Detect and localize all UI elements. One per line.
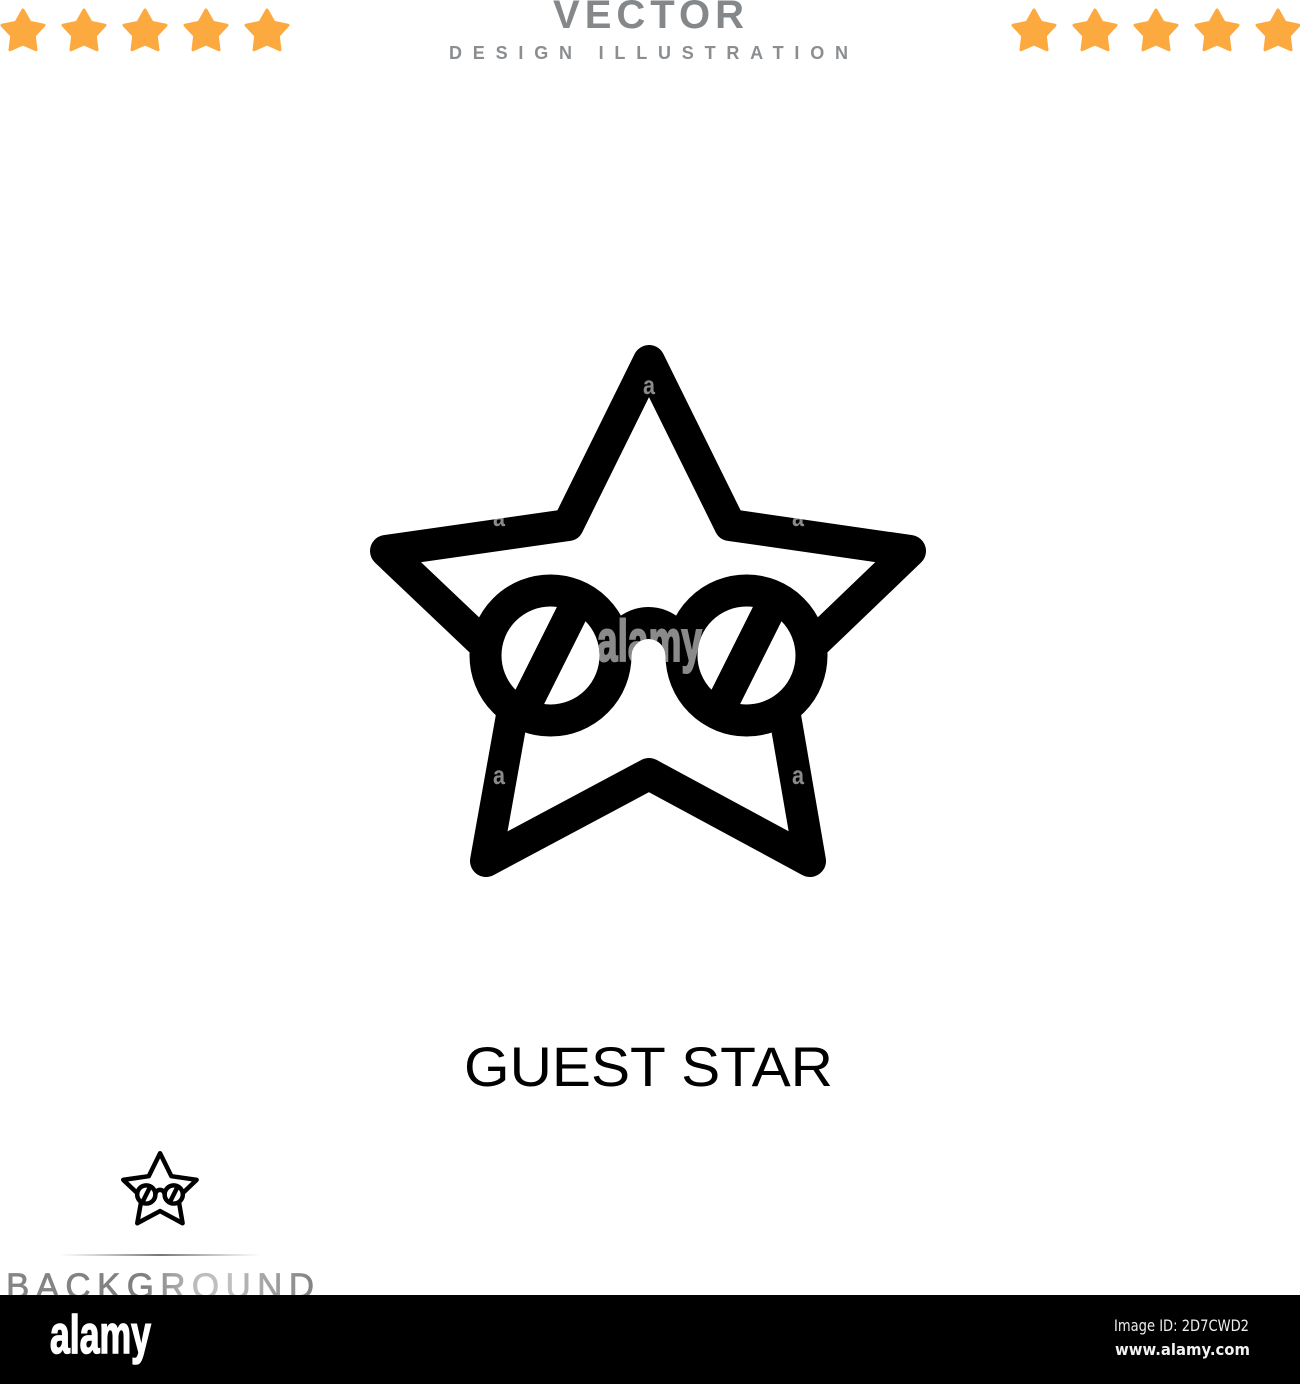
title: guest star: GUEST STAR (464, 1035, 833, 1098)
watermark fragments on star outline: a (643, 370, 655, 400)
logo: alamy: alamy (50, 1305, 151, 1365)
image id: Image ID: 2D7CWD2 (1114, 1316, 1249, 1335)
watermark: centre alamy: alamy (597, 609, 702, 674)
footer bar (0, 1295, 1300, 1384)
website: www.alamy.com (1115, 1340, 1250, 1359)
watermark fragments on star outline: a (792, 760, 804, 790)
watermark fragments on star outline: a (493, 502, 505, 532)
icon: small star with glasses (123, 1153, 197, 1223)
watermark fragments on star outline: a (792, 502, 804, 532)
label: background: BACKGROUND (6, 1267, 314, 1306)
icon: star wearing round glasses (386, 361, 910, 861)
watermark fragments on star outline (493, 370, 804, 790)
star rating: right (1013, 10, 1299, 50)
watermark fragments on star outline: a (493, 760, 505, 790)
star rating: left (2, 10, 288, 50)
subheading: design illustration: DESIGN ILLUSTRATION (449, 43, 848, 63)
